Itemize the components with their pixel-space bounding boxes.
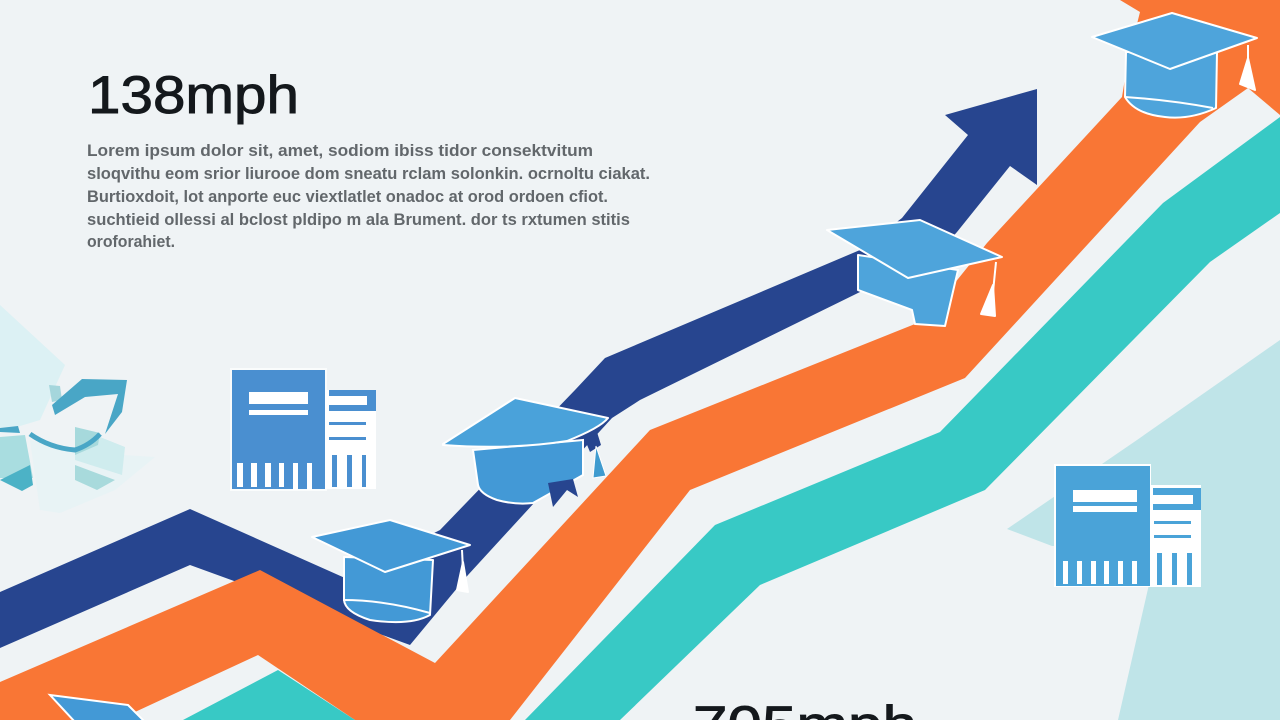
navy rising arrow band (0, 89, 1037, 648)
icon: document chart left (230, 368, 376, 491)
body text block (87, 141, 650, 251)
icon: document chart right (1054, 464, 1201, 587)
heading: 138mph: 138mph (88, 66, 299, 125)
body text block: Burtioxdoit, lot anporte euc viextlatlet onadoc at orod ordoen cfiot. (87, 187, 608, 206)
teal band lower left (183, 670, 355, 720)
body text block: sloqvithu eom srior liurooe dom sneatu rclam solonkin. ocrnoltu ciakat. (87, 164, 650, 183)
icon: graduation cap bottom left (50, 695, 145, 720)
icon: graduation cap centre (443, 398, 608, 507)
teal rising band (525, 117, 1280, 720)
icon: abstract crystal decoration (0, 305, 155, 513)
body text block: suchtieid ollessi al bclost pldipo m ala Brument. dor ts rxtumen stitis (87, 210, 630, 229)
body text block: oroforahiet. (87, 232, 175, 251)
background shape: pale teal wedge (1007, 340, 1280, 720)
icon: graduation cap top right (1092, 13, 1257, 118)
icon: graduation cap upper middle (827, 220, 1002, 326)
body text block: Lorem ipsum dolor sit, amet, sodiom ibiss tidor consektvitum (87, 141, 593, 160)
icon: graduation cap lower (312, 520, 470, 622)
